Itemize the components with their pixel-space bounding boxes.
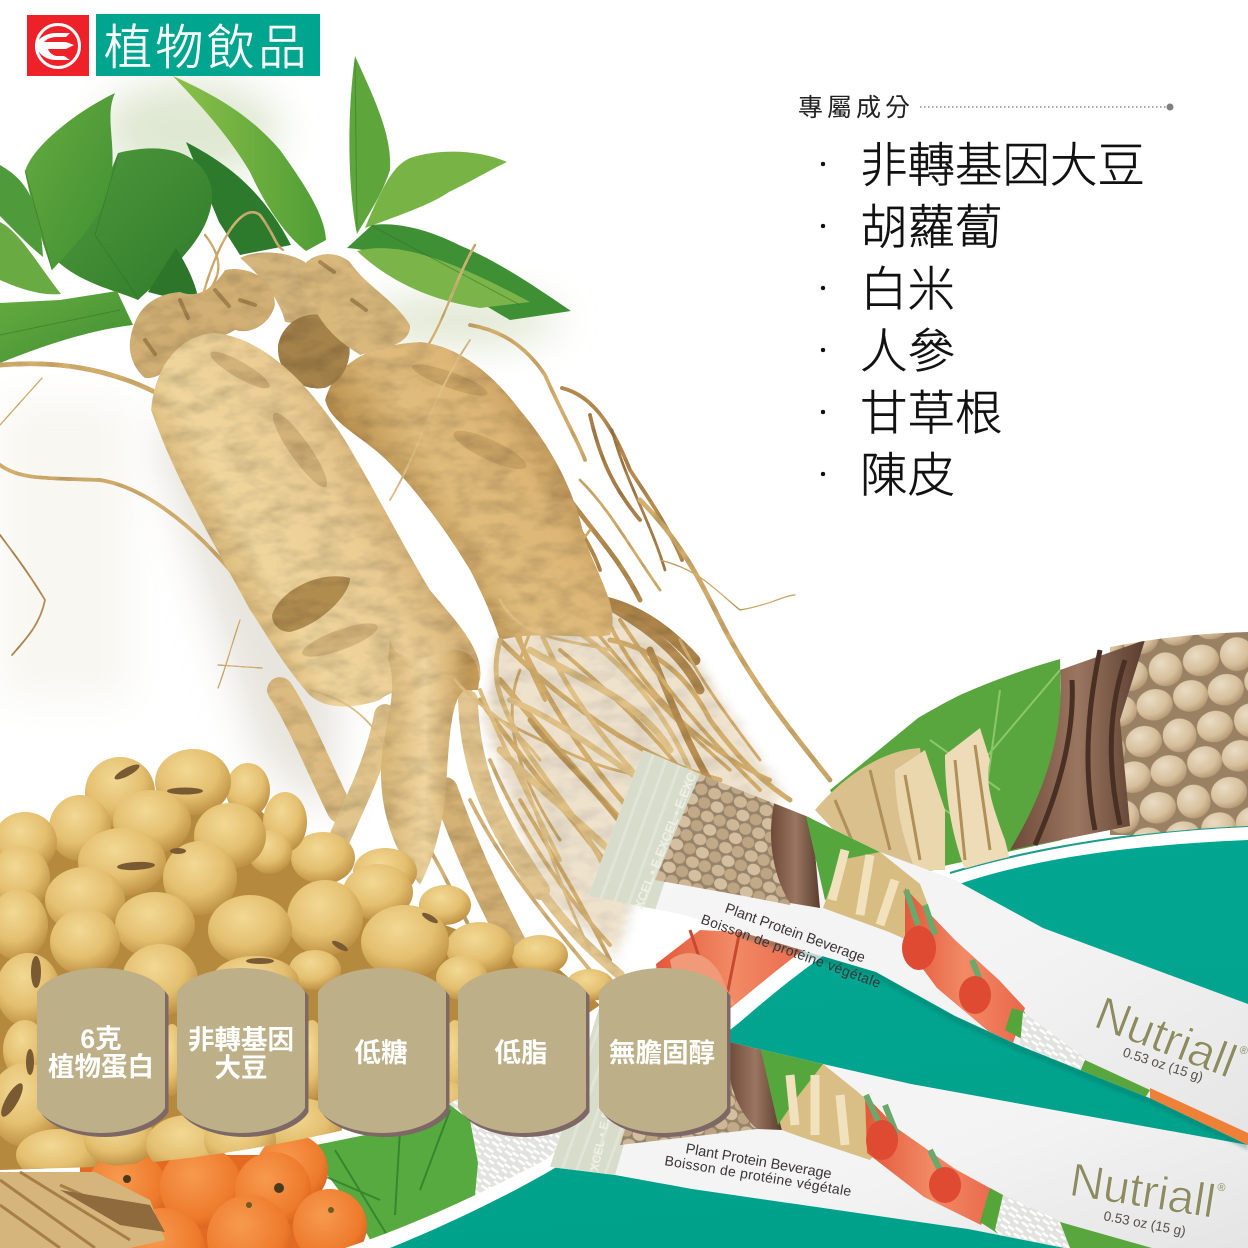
leaf: upright bbox=[349, 56, 390, 234]
sachet 1 end strip bbox=[588, 750, 700, 914]
sachet 1 print leaf bbox=[1005, 1008, 1025, 1040]
band: leaf section bbox=[830, 650, 1062, 880]
scar patch bbox=[272, 576, 350, 632]
item 胡蘿蔔: 胡蘿蔔 bbox=[860, 202, 1002, 255]
tile: 非轉基因大豆 bbox=[177, 968, 308, 1137]
item 陳皮: 陳皮 bbox=[860, 450, 955, 503]
root surface marks bbox=[207, 346, 530, 663]
tile: 6克植物蛋白: 植物蛋白 bbox=[48, 1052, 154, 1082]
white arc bbox=[340, 824, 1248, 1248]
legs bbox=[280, 690, 620, 975]
rootlets behind bbox=[0, 212, 830, 960]
rootlets in front bbox=[310, 340, 660, 950]
teal background with white arc bbox=[340, 824, 1248, 1248]
sachet 2 print rice bbox=[995, 1195, 1070, 1248]
ginseng roots bbox=[0, 212, 830, 975]
sachet 1 brand: Nutriall bbox=[1088, 986, 1244, 1088]
body: left root bbox=[151, 333, 481, 707]
leaves behind ginseng bbox=[0, 56, 571, 363]
leaf: top left bbox=[25, 93, 115, 270]
sachet 2 product name: Plant Protein Beverage bbox=[684, 1141, 833, 1183]
tile: 非轉基因大豆: 大豆 bbox=[214, 1053, 268, 1083]
soybean pile bbox=[0, 749, 614, 1181]
sachet 2 end strip bbox=[550, 1009, 625, 1175]
leaf: big centre bbox=[58, 148, 212, 300]
soybeans bbox=[0, 749, 614, 1181]
sachet 1 print oranges bbox=[1150, 1088, 1248, 1148]
sachet 2 brand: Nutriall bbox=[1066, 1153, 1219, 1228]
leaf: right pointed bbox=[365, 152, 507, 228]
leaf: left edge lower bbox=[0, 222, 61, 294]
sachet 1 weight: 0.53 oz (15 g) bbox=[1121, 1045, 1205, 1085]
sachet 1 print carrots bbox=[905, 888, 1025, 1046]
sachet 2 print leaf tail bbox=[1060, 1222, 1152, 1248]
leaf: long top bbox=[173, 76, 326, 251]
item 非轉基因大豆: 非轉基因大豆 bbox=[860, 140, 1145, 193]
sachet 2 print carrots bbox=[865, 1095, 999, 1225]
tile: 非轉基因大豆: 非轉基因 bbox=[188, 1025, 294, 1055]
band: leaf lower bbox=[318, 1105, 478, 1240]
sachet 2 print soybeans bbox=[620, 1042, 757, 1145]
sachet 1 french name: Boisson de protéine végétale bbox=[699, 911, 883, 991]
leaf: lower right dark bbox=[347, 224, 571, 320]
sachet 2 print leaf bbox=[980, 1188, 1003, 1235]
soft shadows on surface bbox=[0, 80, 560, 820]
sachet 2 strip label: XCEL • E.EXCEL bbox=[587, 1078, 620, 1173]
header logo bbox=[27, 15, 89, 76]
sachet 2 wrapper bbox=[555, 1042, 1248, 1248]
body: right root bbox=[325, 342, 613, 640]
tile: 6克植物蛋白 bbox=[37, 968, 168, 1137]
head: right root bbox=[240, 252, 335, 330]
teal panel bbox=[390, 840, 1248, 1248]
tile: 6克植物蛋白: 6克 bbox=[80, 1024, 122, 1054]
tile: 低糖: 低糖 bbox=[354, 1038, 408, 1068]
sachet 2 print ginseng bbox=[760, 1046, 898, 1160]
sachet 1 print licorice bbox=[771, 800, 820, 908]
bean hila bbox=[0, 762, 439, 1119]
icon: swallow emblem bbox=[36, 33, 74, 60]
item 白米: 白米 bbox=[860, 264, 955, 317]
ingredients heading bbox=[798, 94, 1174, 122]
leaf: left edge bbox=[0, 165, 43, 257]
head: left root bbox=[130, 269, 275, 378]
item 甘草根: 甘草根 bbox=[860, 388, 1002, 441]
tile: 低糖 bbox=[318, 968, 450, 1137]
sachet 1 print ginseng bbox=[823, 852, 928, 945]
ingredients list bbox=[821, 140, 1145, 503]
sachet 1 print leaf tail bbox=[1080, 1060, 1150, 1098]
sachet 2 brand: ® bbox=[1216, 1181, 1226, 1194]
tile: 低脂 bbox=[458, 968, 590, 1137]
sachet 1 print soybeans bbox=[655, 774, 806, 905]
tile: 無膽固醇 bbox=[599, 968, 730, 1137]
root fan underlay bbox=[480, 590, 790, 960]
leaf: lower right light bbox=[357, 248, 530, 308]
tile: 無膽固醇: 無膽固醇 bbox=[609, 1038, 715, 1068]
band: licorice sticks bbox=[0, 1172, 165, 1248]
band: soybeans bbox=[1110, 625, 1248, 835]
sachet 1 print leaf bbox=[806, 816, 880, 900]
band: oranges bbox=[80, 1134, 367, 1248]
ingredient band bbox=[0, 625, 1248, 1248]
sachet 1 wrapper bbox=[580, 740, 1248, 1160]
sachet 2 print licorice bbox=[728, 1042, 782, 1130]
header title: 植物飲品 bbox=[104, 22, 310, 75]
band: carrots bbox=[656, 930, 810, 1030]
item 人參: 人參 bbox=[860, 326, 955, 379]
feature tiles bbox=[37, 968, 730, 1137]
leaf: low light bbox=[0, 291, 133, 363]
tile: 低脂: 低脂 bbox=[494, 1038, 548, 1068]
band: ginseng bbox=[815, 728, 1010, 880]
sachet 1 strip label: XCEL • E.EXCEL • E.EXC bbox=[631, 770, 700, 911]
leaf: dark back bbox=[186, 142, 291, 255]
sachet 1 product name: Plant Protein Beverage bbox=[723, 901, 867, 966]
sachet 1 print rice bbox=[1020, 1012, 1090, 1075]
band: licorice bbox=[1010, 640, 1145, 850]
ingredients heading: 專屬成分 bbox=[798, 94, 914, 122]
band: rice bbox=[450, 1099, 560, 1195]
thin teal line bbox=[950, 826, 1248, 873]
product sachet upper bbox=[580, 740, 1248, 1160]
sachet 2 weight: 0.53 oz (15 g) bbox=[1102, 1208, 1187, 1239]
sachet 2 french name: Boisson de protéine végétale bbox=[664, 1152, 853, 1199]
leaf: small dark bbox=[148, 248, 199, 305]
product sachet lower bbox=[540, 1000, 1248, 1248]
